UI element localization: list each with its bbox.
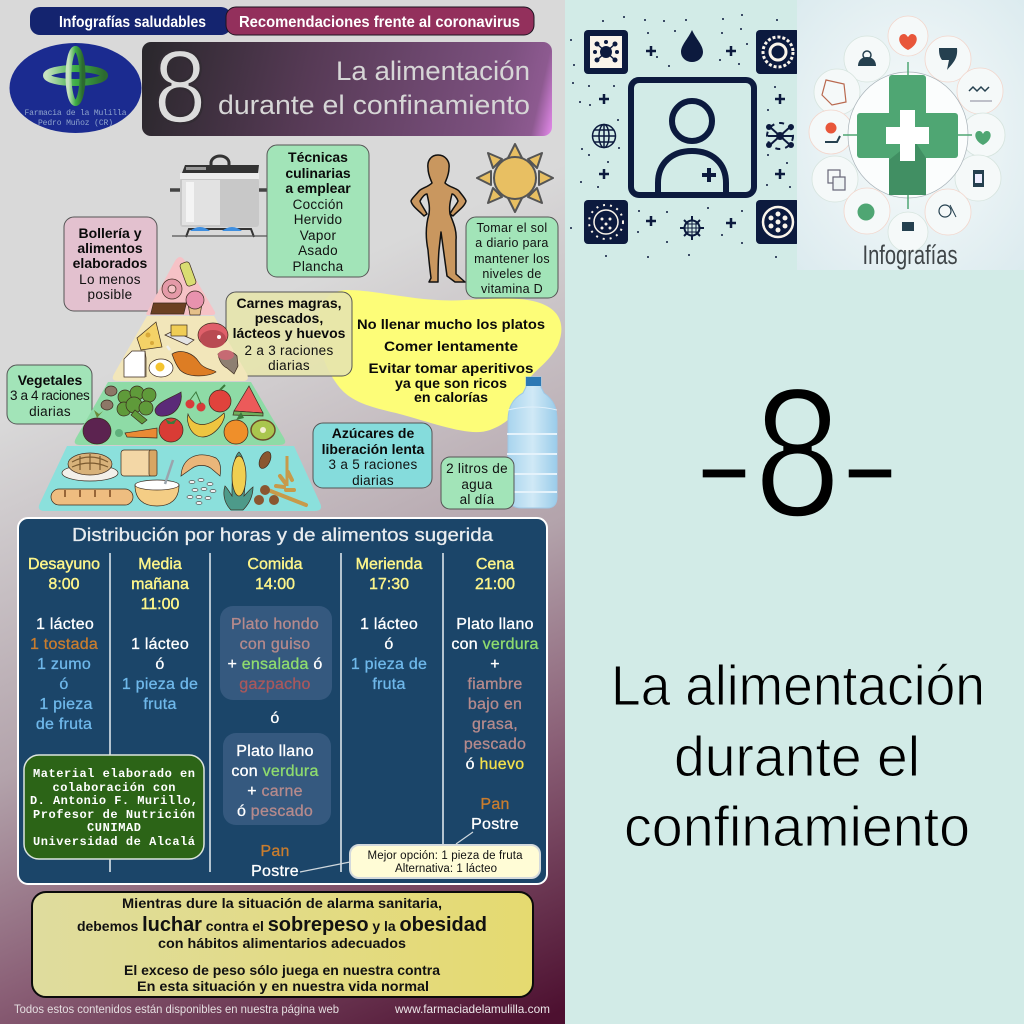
- panel: left infographic background: [0, 0, 565, 1024]
- icon: corner squares: [584, 30, 800, 244]
- logo: Farmacia de la Mulilla: Pedro Muñoz (CR): [38, 119, 113, 128]
- column: Desayuno: 1 tostada: [30, 636, 98, 653]
- big title text: durante el: [674, 725, 920, 789]
- label: sunlight and vitamin D: mantener los: [474, 252, 550, 266]
- column: Cena: Postre: [471, 816, 519, 833]
- label: 2 liters of water: agua: [461, 477, 493, 492]
- panel: closing message: Mientras dure la situación de alarma sanitaria,: [122, 895, 442, 911]
- label: cooking techniques: culinarias: [285, 165, 351, 181]
- column: Merienda: [351, 556, 427, 693]
- icon cluster: profile and virus icons: [570, 14, 800, 258]
- header pill: Recomendaciones frente al coronavirus: [226, 7, 534, 35]
- icon: cooking pot on stove: [170, 156, 269, 237]
- column: Cena: ó huevo: [466, 756, 524, 773]
- panel: closing message: debemos luchar contra el sobrepeso y la obesidad: [77, 914, 487, 936]
- column: Desayuno: de fruta: [36, 716, 92, 733]
- column: Media mañana: ó: [155, 656, 165, 673]
- label: sunlight and vitamin D: niveles de: [482, 267, 542, 281]
- credits box: [24, 755, 204, 859]
- column: Desayuno: 1 zumo: [37, 656, 91, 673]
- callout: best dessert option: [350, 845, 540, 878]
- label: slow release sugars: [313, 423, 432, 488]
- column: Cena: pescado: [464, 736, 526, 753]
- icon: drop: [681, 30, 703, 62]
- logo caption: Infografías: [862, 240, 958, 270]
- header pill: Recomendaciones frente al coronavirus: Recomendaciones frente al coronavirus: [239, 14, 520, 31]
- header pill: Infografías saludables: Infografías saludables: [59, 14, 206, 31]
- connector lines to dessert note: [300, 832, 473, 872]
- label: lean meats, fish, dairy and eggs: diarias: [268, 358, 310, 373]
- credits box: colaboración con: [52, 781, 176, 795]
- column: Media mañana: mañana: [131, 576, 189, 593]
- label: slow release sugars: liberación lenta: [322, 441, 425, 457]
- column: Comida: Plato llano: [236, 743, 314, 760]
- label: sunlight and vitamin D: [466, 217, 558, 298]
- icon: molecule: [766, 123, 794, 149]
- column: Cena: con verdura: [451, 636, 539, 653]
- label: sunlight and vitamin D: vitamina D: [481, 282, 543, 296]
- credits box: D. Antonio F. Murillo,: [30, 794, 198, 808]
- column: Merienda: 17:30: [369, 576, 409, 593]
- label: cooking techniques: Hervido: [294, 212, 342, 227]
- big title text: La alimentación: [611, 654, 985, 718]
- title banner: [142, 31, 552, 145]
- label: vegetables: diarias: [29, 404, 71, 419]
- header pill: Infografías saludables: [30, 7, 231, 35]
- panel: closing message: El exceso de peso sólo juega en nuestra contra: [124, 962, 440, 978]
- credits box: CUNIMAD: [87, 821, 141, 835]
- big number -8-: -: [695, 410, 753, 522]
- column: Media mañana: fruta: [143, 696, 177, 713]
- label: slow release sugars: Azúcares de: [332, 425, 414, 441]
- title banner: durante el confinamiento: [218, 90, 530, 120]
- label: pastries: alimentos: [77, 240, 143, 256]
- big number -8-: -: [841, 410, 899, 522]
- column: Media mañana: 1 lácteo: [131, 636, 189, 653]
- icon: globe: [592, 124, 616, 148]
- ring of health icons: [809, 16, 1005, 252]
- panel: closing message: [32, 892, 533, 997]
- label: cooking techniques: [267, 145, 369, 277]
- column: Desayuno: 8:00: [48, 576, 80, 593]
- label: cooking techniques: Técnicas: [288, 149, 348, 165]
- footer left text: Todos estos contenidos están disponibles en nuestra página web: [14, 1002, 339, 1016]
- label: cooking techniques: Vapor: [300, 228, 336, 243]
- label: cooking techniques: Asado: [298, 243, 338, 258]
- panel: closing message: En esta situación y en nuestra vida normal: [137, 978, 429, 994]
- credits box: Material elaborado en: [33, 767, 195, 781]
- yellow callout advice text: [357, 316, 545, 405]
- label: slow release sugars: 3 a 5 raciones: [328, 457, 418, 472]
- label: 2 liters of water: [441, 457, 514, 509]
- label: sunlight and vitamin D: Tomar el sol: [477, 221, 547, 235]
- label: pastries: elaborados: [73, 255, 148, 271]
- label: cooking techniques: Cocción: [293, 197, 343, 212]
- column: Desayuno: Desayuno: [28, 556, 100, 573]
- label: slow release sugars: diarias: [352, 473, 394, 488]
- logo: Farmacia de la Mulilla: [10, 43, 142, 133]
- column: Desayuno: 1 pieza: [39, 696, 93, 713]
- logo: Farmacia de la Mulilla: Farmacia de la Mulilla: [24, 109, 127, 118]
- column: Comida: ó: [270, 710, 280, 727]
- callout shape: yellow blob: [317, 290, 561, 432]
- tier: carbohydrates: [39, 446, 321, 511]
- column: Cena: [451, 556, 539, 833]
- column: Cena: Cena: [476, 556, 514, 573]
- label: lean meats, fish, dairy and eggs: Carnes magras,: [236, 295, 342, 311]
- column: Comida: ó pescado: [237, 803, 313, 820]
- column: Media mañana: Media: [138, 556, 182, 573]
- tier: sweets: [146, 257, 215, 315]
- column: Comida: + carne: [247, 783, 303, 800]
- column: Merienda: ó: [384, 636, 394, 653]
- column: Desayuno: ó: [59, 676, 69, 693]
- column: Media mañana: [122, 556, 198, 713]
- label: vegetables: [7, 365, 92, 424]
- column: Comida: Plato hondo: [231, 616, 319, 633]
- big title text: [611, 654, 985, 859]
- tier: vegetables and fruit: [75, 382, 285, 445]
- credits box: Profesor de Nutrición: [33, 808, 195, 822]
- column: Cena: grasa,: [472, 716, 518, 733]
- credits box: Universidad de Alcalá: [33, 835, 195, 849]
- icon: sun: [477, 144, 553, 212]
- column: Merienda: fruta: [372, 676, 406, 693]
- column: Media mañana: 11:00: [141, 596, 180, 613]
- icon: green cross: [857, 75, 958, 195]
- label: 2 liters of water: al día: [460, 492, 495, 507]
- column: Merienda: Merienda: [356, 556, 422, 573]
- icon: person frame: [631, 80, 754, 195]
- panel: pharmacy infographics logo: [797, 0, 1024, 270]
- icon: bottom virus: [680, 216, 704, 240]
- label: pastries: [64, 217, 157, 311]
- title banner: 8: [152, 31, 208, 145]
- column: Cena: bajo en: [468, 696, 522, 713]
- callout: best dessert option: Mejor opción: 1 pieza de fruta: [368, 850, 523, 862]
- icon: plus signs: [599, 46, 785, 228]
- label: pastries: posible: [88, 287, 132, 302]
- table heading: Distribución por horas y de alimentos sugerida: [72, 525, 494, 545]
- label: 2 liters of water: 2 litros de: [446, 461, 508, 476]
- column: Comida: con verdura: [231, 763, 319, 780]
- yellow callout advice text: No llenar mucho los platos: [357, 316, 545, 332]
- column: Comida: gazpacho: [239, 676, 311, 693]
- column: Cena: Pan: [480, 796, 510, 813]
- yellow callout advice text: en calorías: [414, 389, 488, 405]
- small health glyphs: [822, 34, 992, 231]
- column: Media mañana: 1 pieza de: [122, 676, 198, 693]
- column: Comida: con guiso: [240, 636, 310, 653]
- column: Comida: Comida: [247, 556, 303, 573]
- title banner: La alimentación: [336, 56, 530, 86]
- label: cooking techniques: Plancha: [293, 259, 344, 274]
- label: lean meats, fish, dairy and eggs: lácteos y huevos: [233, 325, 346, 341]
- column: Desayuno: 1 lácteo: [36, 616, 94, 633]
- label: sunlight and vitamin D: a diario para: [475, 236, 549, 250]
- panel: meal schedule table: [18, 518, 547, 884]
- panel: closing message: con hábitos alimentarios adecuados: [158, 935, 406, 951]
- column: Cena: fiambre: [467, 676, 523, 693]
- label: cooking techniques: a emplear: [285, 180, 351, 196]
- yellow callout advice text: ya que son ricos: [395, 375, 507, 391]
- label: pastries: Bollería y: [78, 225, 142, 241]
- label: vegetables: 3 a 4 raciones: [10, 388, 90, 403]
- column: Merienda: 1 lácteo: [360, 616, 418, 633]
- column: Comida: 14:00: [255, 576, 295, 593]
- column: Cena: 21:00: [475, 576, 515, 593]
- label: lean meats, fish, dairy and eggs: 2 a 3 raciones: [244, 343, 334, 358]
- label: pastries: Lo menos: [79, 272, 141, 287]
- column: Cena: +: [490, 656, 500, 673]
- column: Desayuno: [28, 556, 100, 733]
- column: Comida: + ensalada ó: [227, 656, 323, 673]
- big number -8-: 8: [750, 355, 845, 558]
- yellow callout advice text: Comer lentamente: [384, 338, 518, 354]
- icon: water bottle: [507, 377, 557, 508]
- big title text: confinamiento: [624, 795, 970, 859]
- big number -8-: [695, 355, 899, 558]
- label: lean meats, fish, dairy and eggs: pescados,: [255, 310, 323, 326]
- column: Comida: [220, 556, 332, 880]
- column: Merienda: 1 pieza de: [351, 656, 427, 673]
- column: Comida: Pan: [260, 843, 290, 860]
- callout: best dessert option: Alternativa: 1 lácteo: [395, 863, 497, 875]
- column: Comida: Postre: [251, 863, 299, 880]
- icon: woman silhouette: [411, 155, 466, 282]
- label: lean meats, fish, dairy and eggs: [226, 292, 352, 376]
- food pyramid: [39, 257, 321, 511]
- tier: protein: [113, 316, 248, 381]
- footer website: www.farmaciadelamulilla.com: [394, 1002, 550, 1016]
- yellow callout advice text: Evitar tomar aperitivos: [368, 360, 534, 376]
- column: Cena: Plato llano: [456, 616, 534, 633]
- decorative dots: [570, 14, 791, 258]
- label: vegetables: Vegetales: [18, 372, 83, 388]
